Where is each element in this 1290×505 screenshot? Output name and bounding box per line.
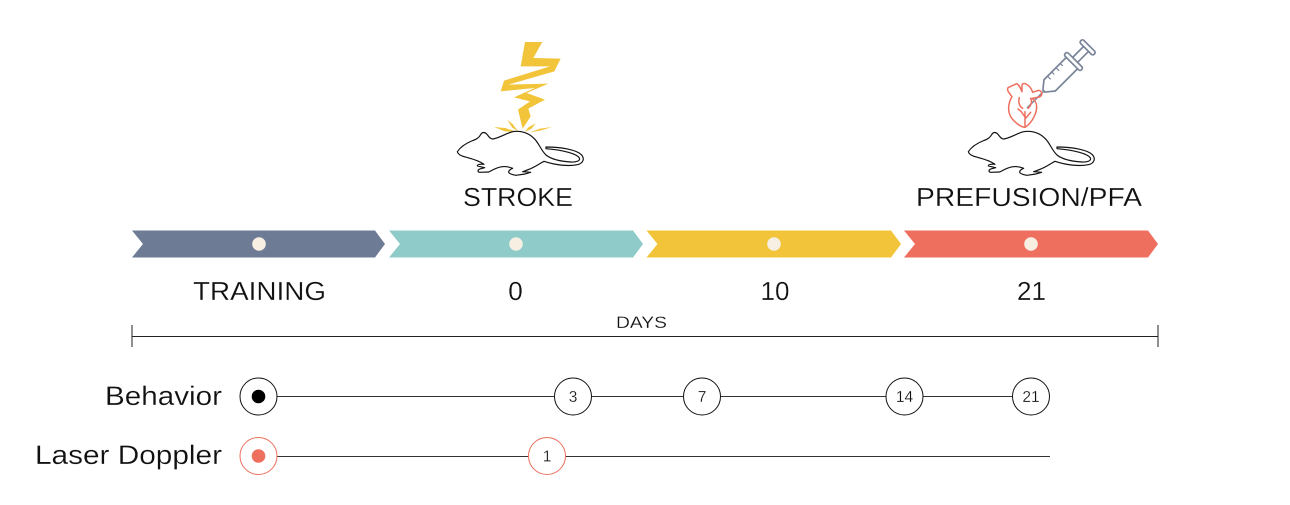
heading: stroke: STROKE bbox=[463, 182, 573, 212]
chevron: day 0 bbox=[389, 230, 643, 258]
row: laser doppler: Laser Doppler bbox=[35, 440, 222, 470]
chevron: day 21 bbox=[904, 230, 1158, 258]
row: behavior: Behavior bbox=[105, 381, 222, 411]
row: laser doppler: 1 bbox=[543, 448, 551, 466]
icon: syringe bbox=[1019, 38, 1097, 116]
label: 21: 21 bbox=[1017, 276, 1046, 306]
label: 0: 0 bbox=[508, 276, 523, 306]
row: behavior: 21 bbox=[1022, 389, 1040, 406]
row: laser doppler bbox=[35, 438, 1050, 474]
days axis: DAYS bbox=[616, 314, 667, 332]
days axis bbox=[132, 314, 1158, 347]
row: behavior: 3 bbox=[569, 389, 577, 406]
stroke icon bbox=[457, 42, 583, 175]
row: behavior: 7 bbox=[698, 389, 706, 406]
label: 10: 10 bbox=[761, 276, 789, 306]
label: training: TRAINING bbox=[193, 276, 326, 306]
chevron timeline bbox=[132, 230, 1158, 258]
icon: mouse bbox=[968, 131, 1094, 175]
icon: mouse bbox=[457, 131, 583, 175]
icon: heart bbox=[1008, 84, 1042, 127]
heading: perfusion: PREFUSION/PFA bbox=[916, 182, 1143, 212]
chevron: training bbox=[132, 230, 385, 258]
icon: lightning bolt bbox=[494, 42, 561, 133]
chevron: day 10 bbox=[646, 230, 901, 258]
row: behavior bbox=[105, 378, 1050, 415]
row: behavior: 14 bbox=[896, 389, 913, 406]
perfusion icon bbox=[968, 38, 1097, 175]
